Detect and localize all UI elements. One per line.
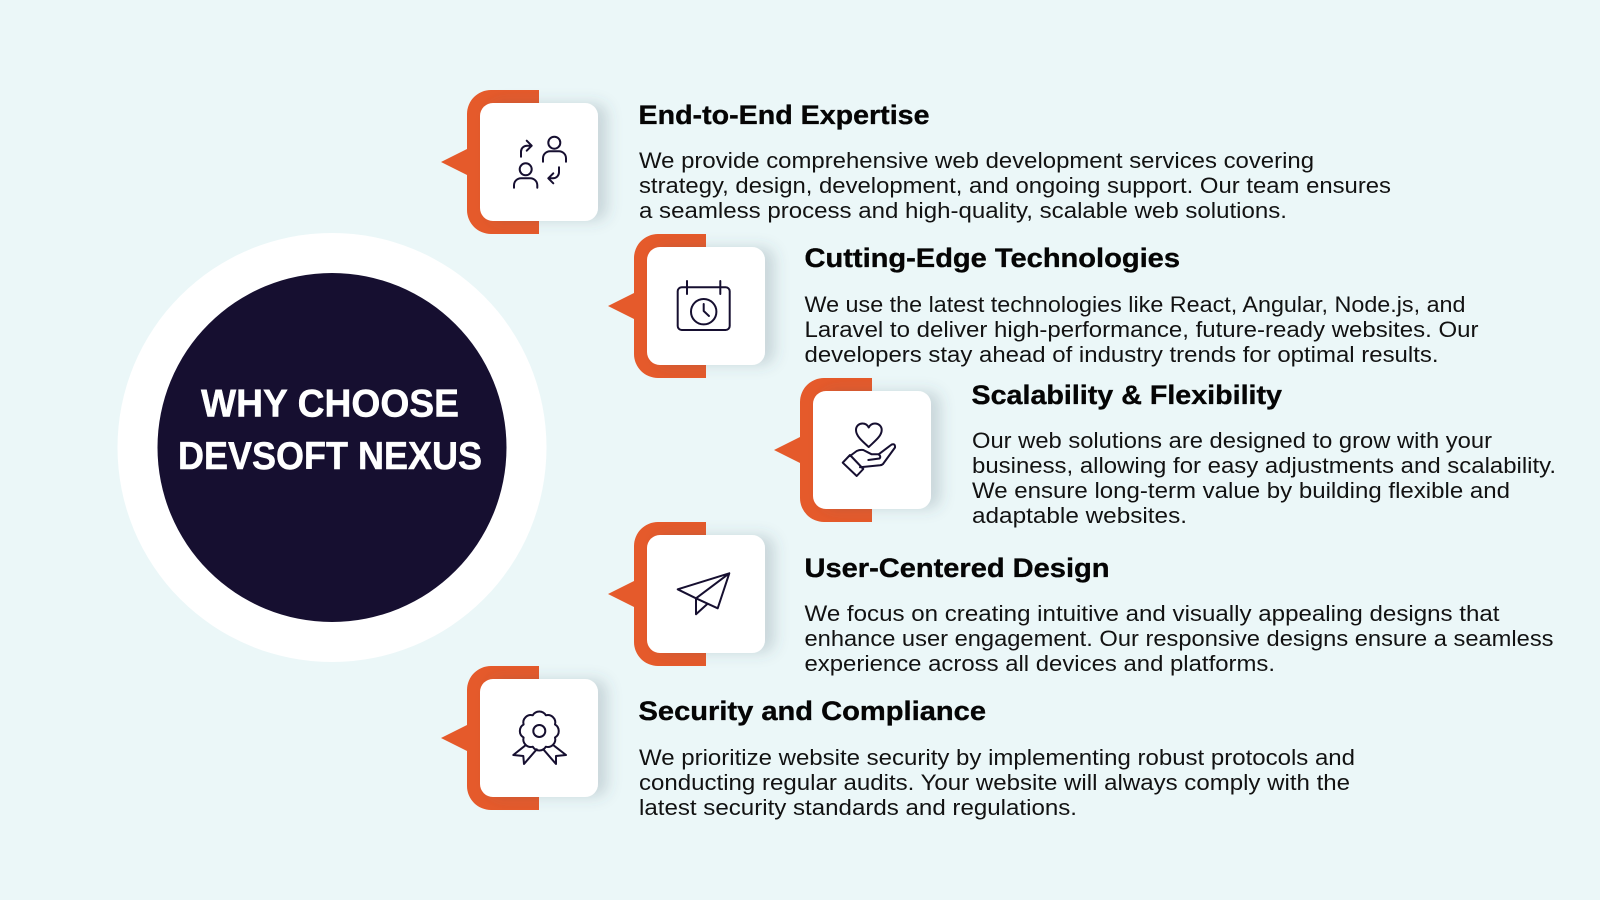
description: a seamless process and high-quality, scalable web solutions. <box>639 198 1287 223</box>
icon: calendar clock <box>678 281 730 330</box>
panel: end-to-end expertise <box>441 90 1391 234</box>
description: experience across all devices and platforms. <box>804 651 1275 676</box>
description: We focus on creating intuitive and visually appealing designs that <box>804 601 1500 626</box>
description: business, allowing for easy adjustments and scalability. <box>972 453 1556 478</box>
panel: scalability and flexibility <box>774 378 1556 528</box>
description <box>972 428 1556 528</box>
title: DEVSOFT NEXUS <box>178 435 482 478</box>
heading: Cutting-Edge Technologies <box>804 243 1180 273</box>
title <box>178 382 482 478</box>
description <box>804 292 1478 367</box>
title: WHY CHOOSE <box>201 382 459 426</box>
callout bracket <box>441 666 598 810</box>
description: strategy, design, development, and ongoing support. Our team ensures <box>639 173 1391 198</box>
description: Our web solutions are designed to grow with your <box>972 428 1492 453</box>
description: We provide comprehensive web development services covering <box>639 148 1314 173</box>
description: We ensure long-term value by building flexible and <box>972 478 1510 503</box>
icon: award badge <box>513 712 566 764</box>
description <box>804 601 1554 676</box>
icon: people exchanging <box>514 137 566 188</box>
callout bracket <box>608 234 765 378</box>
description: developers stay ahead of industry trends for optimal results. <box>804 342 1438 367</box>
description: enhance user engagement. Our responsive designs ensure a seamless <box>804 626 1554 651</box>
heading: End-to-End Expertise <box>638 100 930 130</box>
heading: Scalability & Flexibility <box>972 380 1282 410</box>
callout bracket <box>441 90 598 234</box>
description: adaptable websites. <box>972 503 1187 528</box>
description <box>639 148 1391 223</box>
callout bracket <box>774 378 931 522</box>
description <box>639 745 1355 820</box>
description: conducting regular audits. Your website will always comply with the <box>639 770 1350 795</box>
description: Laravel to deliver high-performance, future-ready websites. Our <box>804 317 1478 342</box>
heading: Security and Compliance <box>638 696 986 726</box>
description: We prioritize website security by implementing robust protocols and <box>639 745 1355 770</box>
icon: paper plane <box>678 573 729 614</box>
panel: cutting-edge technologies <box>608 234 1478 378</box>
heading: User-Centered Design <box>804 553 1110 583</box>
icon: hand with heart <box>843 424 895 476</box>
panel: user-centered design <box>608 522 1554 676</box>
central circle with title <box>118 233 546 662</box>
panel: security and compliance <box>441 666 1355 820</box>
description: latest security standards and regulations. <box>639 795 1077 820</box>
callout bracket <box>608 522 765 666</box>
description: We use the latest technologies like React, Angular, Node.js, and <box>804 292 1466 317</box>
